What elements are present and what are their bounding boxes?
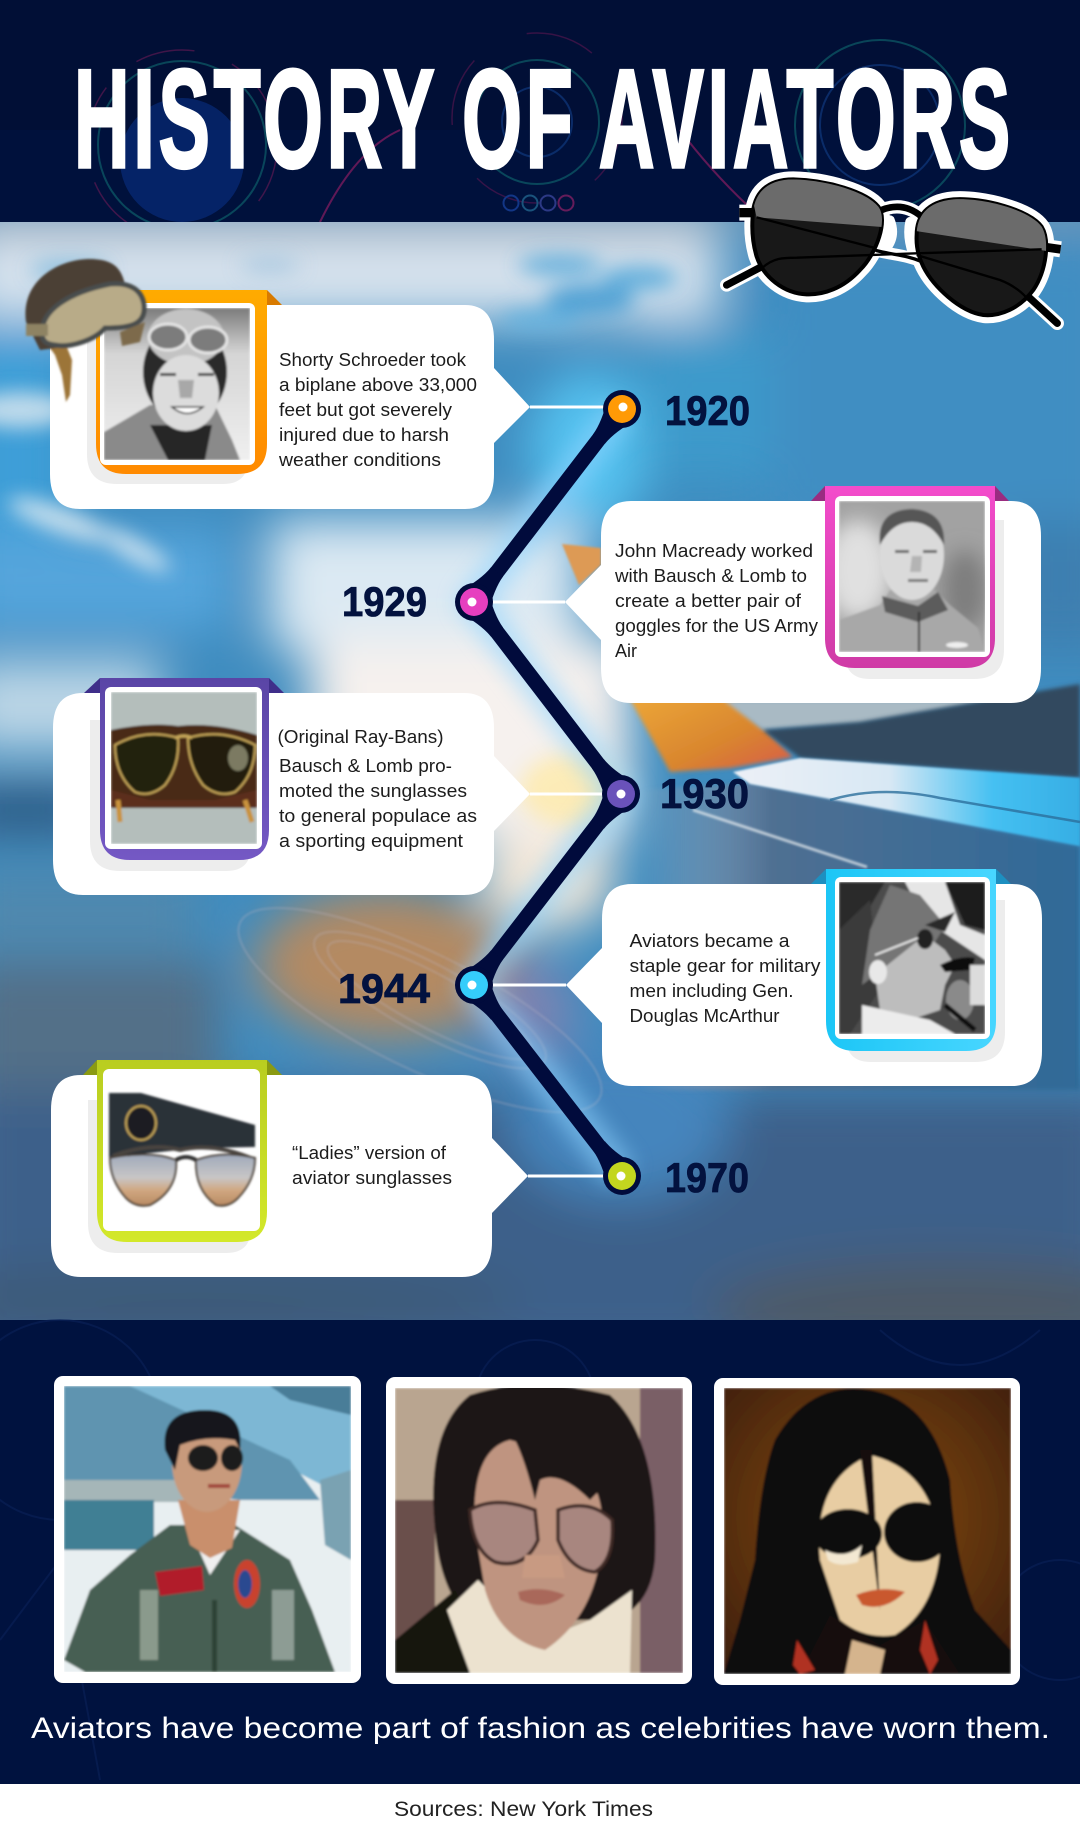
photo: General MacArthur [839, 882, 985, 1034]
text: 1929: create a better pair of [615, 591, 802, 611]
icon: leather flight helmet with goggles [25, 259, 145, 402]
node: 1930 [602, 775, 640, 813]
cyan ribbon frame [811, 869, 1011, 1051]
year: 1920: 1920 [665, 387, 750, 434]
text: 1930: to general populace as [279, 806, 477, 826]
text: 1970: aviator sunglasses [292, 1168, 452, 1188]
year: 1929: 1929 [342, 578, 427, 625]
frame shadow [87, 330, 248, 484]
panel: 1920 card [50, 290, 622, 509]
text: 1970 [292, 1143, 452, 1188]
panel: 1944 card [474, 869, 1042, 1086]
photo: John Macready portrait [839, 501, 985, 652]
panel: 1929 card [474, 486, 1041, 703]
timeline path [460, 398, 636, 1187]
photo card: Michael Jackson [714, 1378, 1020, 1685]
frame shadow [90, 720, 251, 871]
faint radar pattern [0, 1320, 1080, 1780]
text: 1944: Aviators became a [630, 931, 791, 951]
panel: 1930 card [53, 678, 621, 895]
year: 1944: 1944 [338, 965, 431, 1012]
orange ribbon frame [96, 290, 282, 474]
text: 1929 [614, 541, 818, 661]
panel: 1970 card [51, 1060, 622, 1277]
tarmac swirl marks [237, 906, 604, 1114]
photo: pilot portrait [104, 308, 250, 460]
caption: Aviators have become part of fashion as celebrities have worn them. [31, 1712, 1050, 1745]
text: 1920: a biplane above 33,000 [279, 375, 477, 395]
text: 1944: Douglas McArthur [630, 1006, 780, 1026]
grandstand [723, 700, 1000, 730]
panel: celebrities [0, 1320, 1080, 1784]
sky and runway background [0, 200, 1080, 1360]
footer band [0, 1784, 1080, 1830]
node: 1944 [455, 966, 493, 1004]
aircraft tail [562, 544, 601, 585]
text: 1929: Air [615, 641, 637, 661]
sources: Sources: New York Times [394, 1798, 653, 1821]
runway [640, 783, 1080, 1090]
text: 1930 [278, 727, 477, 851]
text: 1930: a sporting equipment [279, 831, 463, 851]
photo: original Ray-Bans [111, 692, 257, 844]
node flares [460, 398, 636, 1187]
node: 1929 [455, 583, 493, 621]
text: 1970: “Ladies” version of [292, 1143, 447, 1163]
text: 1944 [630, 931, 820, 1026]
node: 1920 [603, 390, 641, 428]
frame shadow [845, 520, 1004, 679]
text: 1929: John Macready worked [615, 541, 813, 561]
text: 1930: (Original Ray-Bans) [278, 727, 444, 747]
text: 1920 [278, 350, 477, 470]
purple ribbon frame [84, 678, 284, 860]
text: 1930: Bausch & Lomb pro- [279, 756, 452, 776]
text: 1920: feet but got severely [279, 400, 452, 420]
text: 1920: weather conditions [278, 450, 441, 470]
text: 1930: moted the sunglasses [279, 781, 467, 801]
frame shadow [88, 1100, 251, 1253]
icon: aviator sunglasses [727, 173, 1061, 323]
node: 1970 [603, 1157, 641, 1195]
year: 1970: 1970 [665, 1154, 749, 1201]
text: 1944: staple gear for military [630, 956, 820, 976]
header band [0, 0, 1080, 240]
photo: ladies Ray-Ban with case [109, 1093, 255, 1206]
text: 1944: men including Gen. [630, 981, 794, 1001]
text: 1920: injured due to harsh [279, 425, 449, 445]
header radar pattern [87, 33, 965, 240]
photo card: fighter pilot [54, 1376, 361, 1683]
magenta ribbon frame [811, 486, 1009, 668]
photo card: Elvis [386, 1377, 692, 1684]
lime ribbon frame [83, 1060, 282, 1242]
clouds [0, 255, 678, 579]
text: 1929: with Bausch & Lomb to [614, 566, 807, 586]
year: 1930: 1930 [660, 770, 749, 817]
text: 1920: Shorty Schroeder took [279, 350, 467, 370]
frame shadow [846, 900, 1005, 1062]
text: 1929: goggles for the US Army [615, 616, 818, 636]
